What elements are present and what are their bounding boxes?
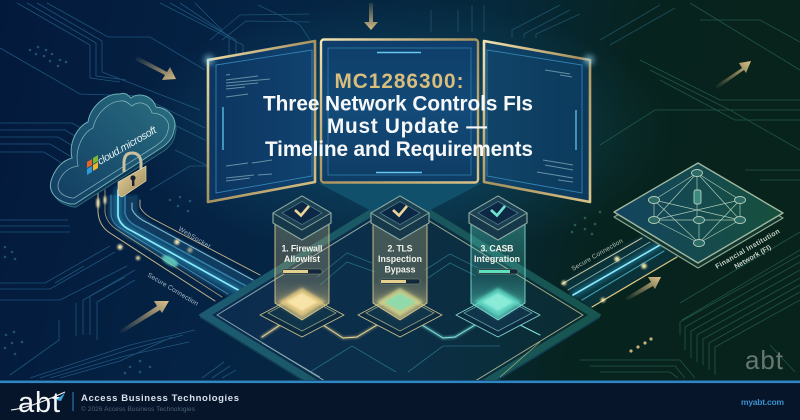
platform inner lines: [262, 253, 540, 377]
panel: Financial Institution Network diagram: [614, 163, 783, 268]
network nodes: [648, 170, 746, 246]
pillar label: 2. TLS: [388, 244, 413, 254]
pillar 3: CASB Integration: [456, 196, 540, 337]
arrow: top right: [715, 61, 751, 89]
panel: centre monitor: [321, 40, 478, 182]
title: Timeline and Requirements: [265, 138, 533, 161]
title: [263, 70, 533, 161]
circuit board lines: left: [0, 3, 243, 378]
pillar label: [378, 244, 422, 274]
label: Secure Connection (left): Secure Connection: [146, 272, 200, 308]
progress bar: [380, 279, 420, 284]
pillar 2: TLS Inspection Bypass: [358, 196, 442, 337]
pillar label: Integration: [474, 254, 520, 264]
label: Financial Institution Network: Network (FI): [734, 244, 773, 271]
watermark logo: abt: [745, 345, 784, 375]
arrow: right lower: [625, 277, 661, 301]
icon: check: [393, 206, 407, 216]
label: WebSocket: WebSocket: [177, 226, 212, 250]
footer divider: [72, 392, 74, 411]
platform: [200, 192, 600, 420]
pillar 1: Firewall Allowlist: [260, 196, 344, 337]
pillar label: [282, 244, 322, 264]
circuit board lines: right: [580, 3, 800, 378]
footer logo: abt: [18, 387, 60, 419]
pillar label: 3. CASB: [480, 244, 514, 254]
icon: check: [491, 206, 505, 216]
dots near right connector: [629, 337, 653, 353]
copyright: © 2026 Access Business Technologies: [81, 405, 196, 413]
title: Three Network Controls FIs: [263, 92, 533, 116]
title: MC1286300:: [334, 70, 464, 93]
icon: padlock: [118, 153, 146, 197]
decorative dot clusters: [4, 46, 191, 374]
pillar label: Bypass: [384, 264, 416, 274]
glow at monitor corners: [204, 55, 214, 65]
website: myabt.com: [741, 397, 784, 407]
light beam under title panel: [318, 183, 482, 226]
progress bar: [478, 269, 518, 274]
pillar label: [474, 244, 520, 264]
company name: Access Business Technologies: [81, 393, 239, 404]
icon: Microsoft logo: [87, 155, 98, 175]
label: Secure Connection (right): Secure Connection: [570, 237, 625, 273]
footer: [0, 380, 800, 420]
title: Must Update —: [327, 115, 487, 138]
pillar label: Inspection: [378, 254, 422, 264]
network links: [654, 173, 740, 243]
connection: platform to FI network: [560, 235, 680, 309]
progress bar: [282, 269, 322, 274]
glowing traces between pillars: [262, 325, 540, 338]
arrow: top left: [135, 56, 176, 80]
panel: right monitor: [484, 41, 590, 202]
connection: cloud to platform: [96, 190, 260, 301]
arrow: bottom left: [119, 301, 169, 334]
circuit board lines: top centre: [210, 5, 675, 45]
pillar label: 1. Firewall: [282, 244, 322, 254]
panel: left monitor: [208, 41, 315, 202]
pillar label: Allowlist: [284, 254, 320, 264]
arrow: top centre: [364, 3, 378, 30]
icon: check: [295, 206, 309, 216]
cloud.microsoft cloud icon: [50, 93, 176, 207]
label: cloud.microsoft: cloud.microsoft: [96, 124, 160, 168]
label: Financial Institution Network: Financial Institution: [714, 228, 781, 271]
